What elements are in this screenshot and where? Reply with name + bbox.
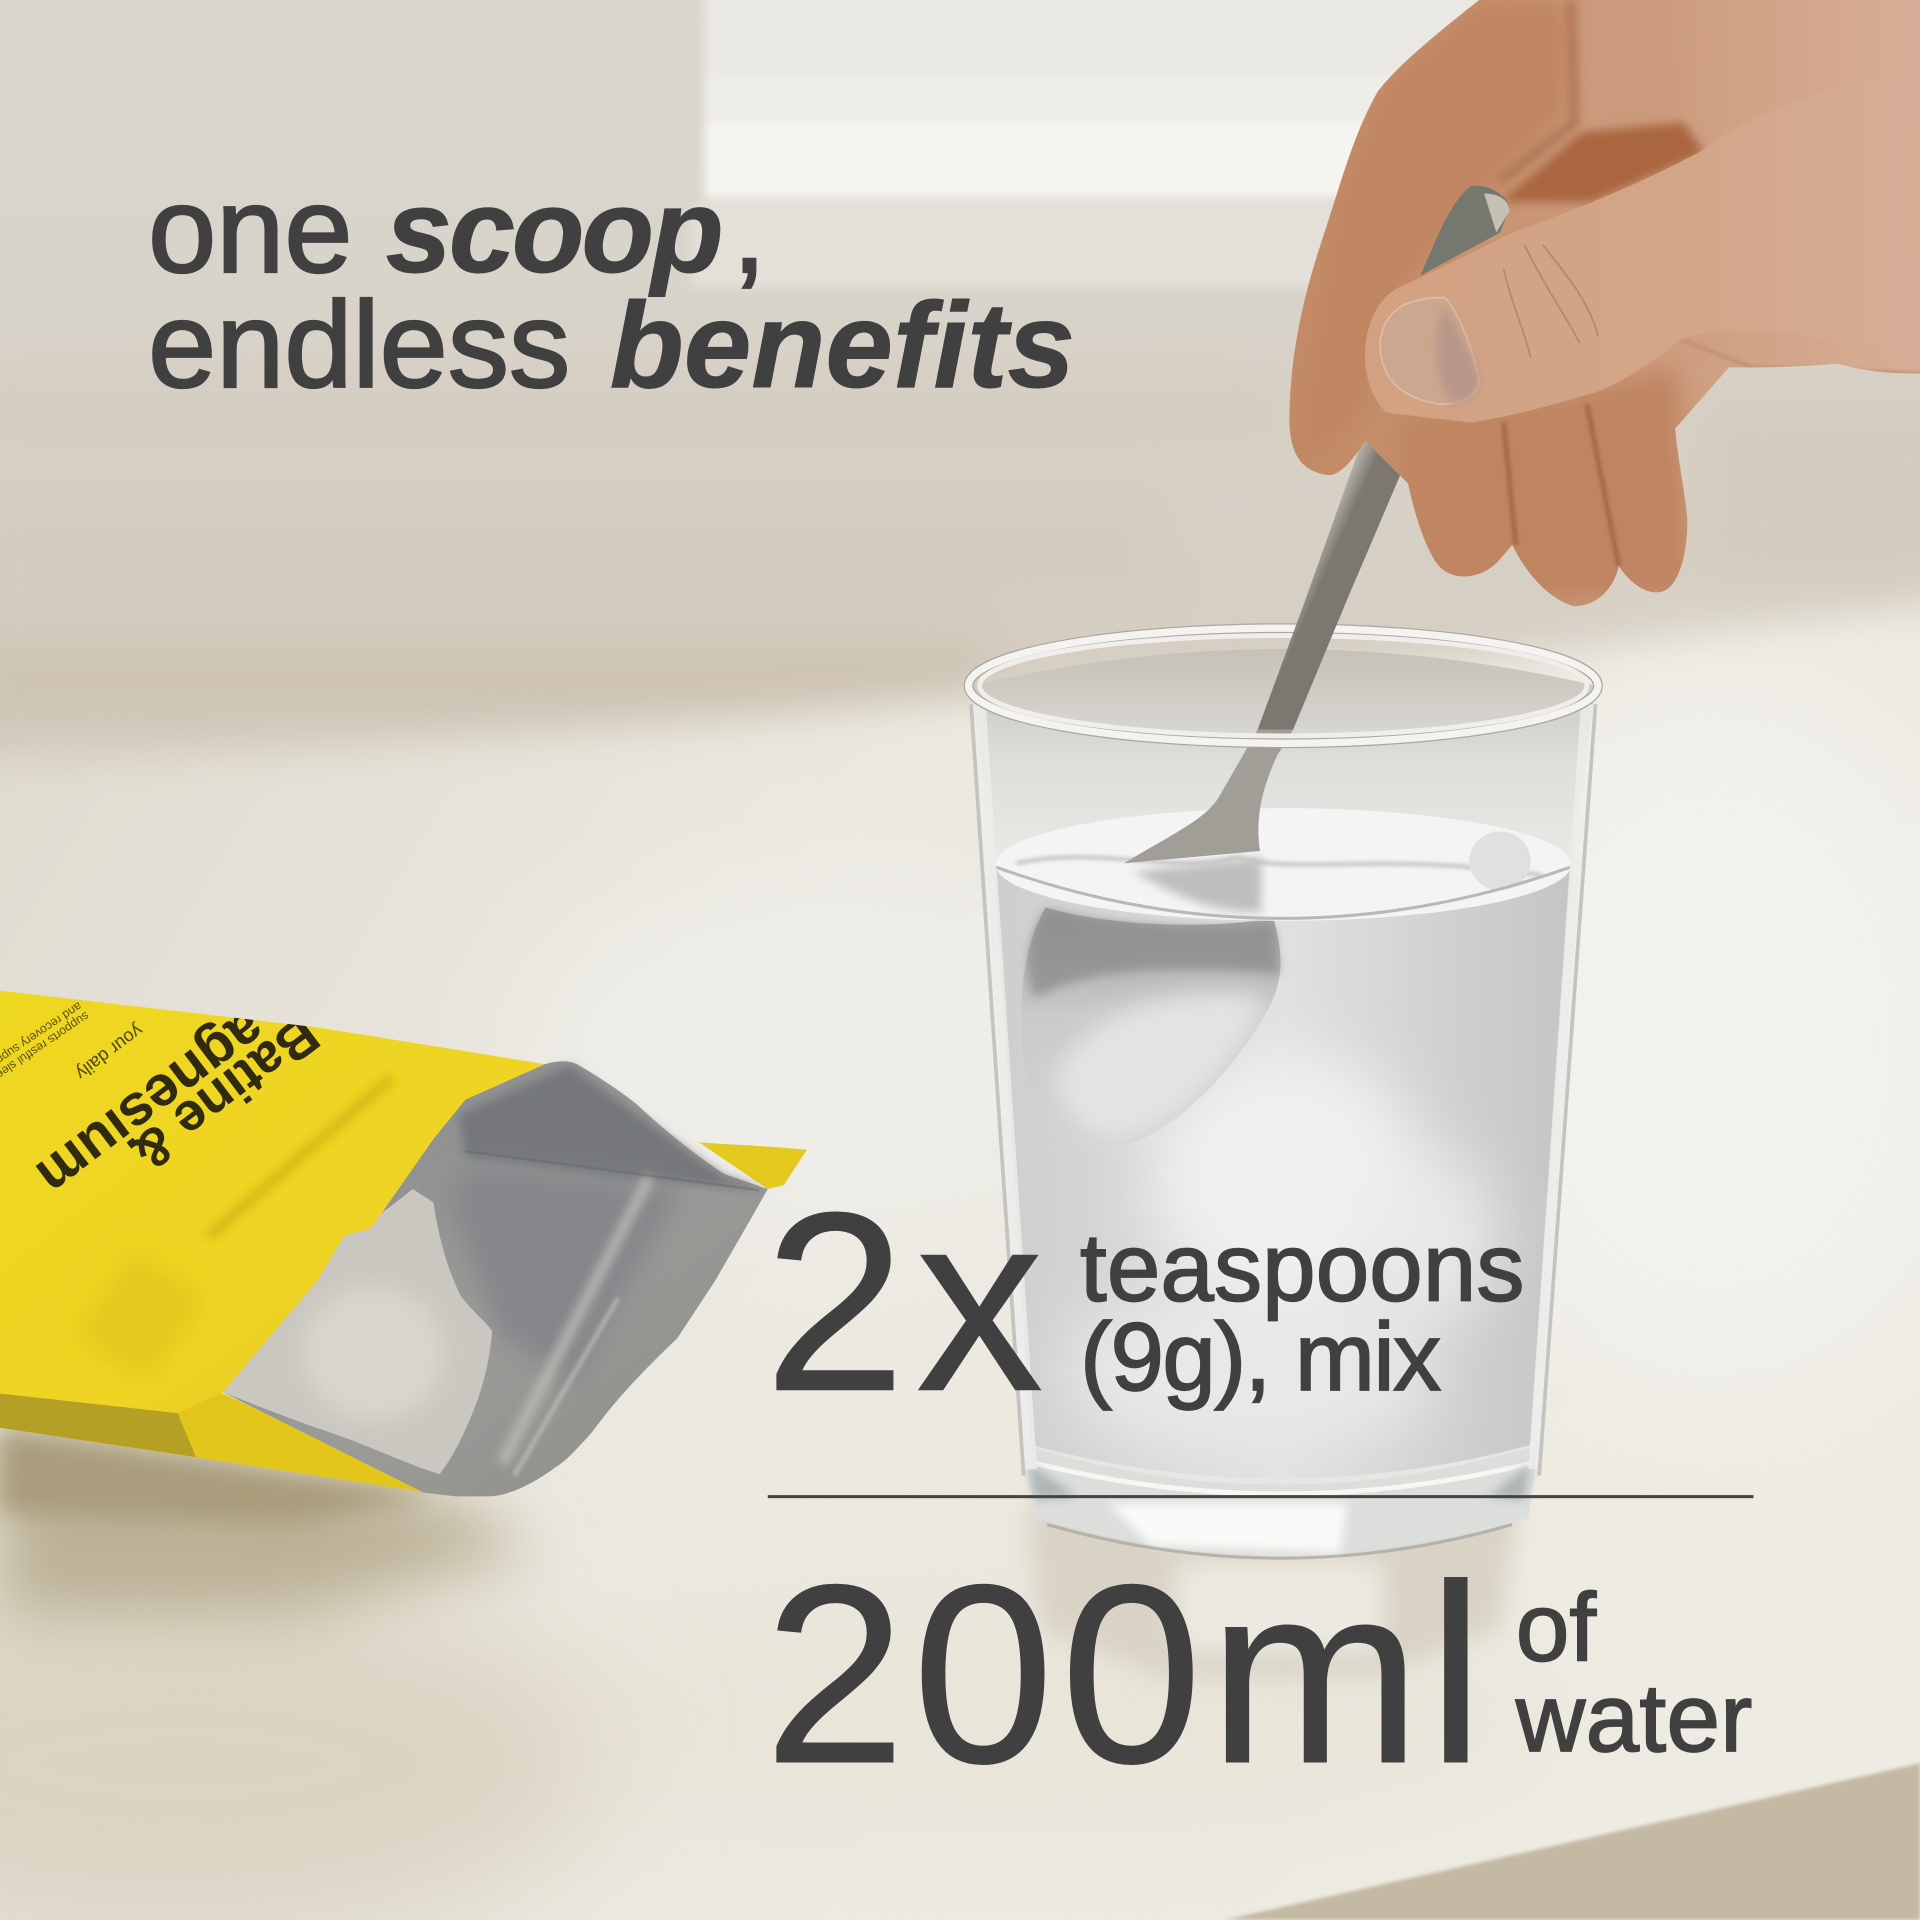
hand shading — [1298, 0, 1920, 600]
dissolving powder cloud — [1065, 1053, 1494, 1457]
hand shape — [1289, 0, 1920, 606]
submerged spoon bowl — [1021, 907, 1281, 1146]
pouch shadow — [0, 1580, 600, 1920]
product pouch — [0, 991, 807, 1496]
teaspoons label: (9g), mix — [1080, 1304, 1441, 1411]
pouch label text: agnesium — [25, 996, 278, 1209]
back ledge — [0, 380, 1920, 722]
spoon neck — [1124, 730, 1293, 863]
silver interior — [223, 1061, 768, 1496]
glass rim — [969, 628, 1598, 743]
title line 1: , — [732, 161, 766, 298]
dosage stat: 2x teaspoons: 2x — [764, 1159, 1043, 1444]
pouch back flap — [699, 1142, 807, 1189]
counter front edge — [1224, 1763, 1920, 1920]
pouch label text: your daily — [71, 1020, 147, 1085]
title line 2: endless — [148, 276, 570, 413]
thumb nail — [1380, 298, 1479, 404]
title line 1: one — [148, 161, 352, 298]
lower yellow flap — [0, 1393, 444, 1495]
water body — [994, 863, 1571, 1479]
bright light on counter — [1433, 686, 1920, 1396]
teaspoons label: teaspoons — [1080, 1214, 1524, 1321]
title line 1: scoop — [386, 165, 724, 298]
title line 2 — [148, 276, 1075, 413]
title line 2: benefits — [610, 277, 1075, 413]
dosage stat: 2x teaspoons — [764, 1159, 1524, 1444]
pouch seam shading — [208, 1078, 392, 1237]
water stat: 200ml of water: 200ml — [764, 1531, 1484, 1816]
pouch label text: Batine & — [120, 1004, 330, 1184]
interior fold — [459, 1065, 765, 1190]
water surface — [996, 808, 1571, 921]
of water label — [1515, 1574, 1752, 1772]
window light — [692, 0, 1512, 288]
glass base — [1024, 1445, 1538, 1555]
glass of water — [969, 628, 1598, 1558]
title line 1 — [148, 161, 766, 298]
barcode stripe — [0, 1393, 196, 1457]
yellow body — [0, 991, 545, 1413]
of water label: of — [1516, 1574, 1596, 1681]
spoon handle — [1258, 186, 1510, 730]
glass walls — [980, 704, 1031, 1469]
divider line — [768, 1495, 1753, 1498]
spoon tip between fingers — [1420, 186, 1510, 276]
thumb — [1365, 73, 1920, 422]
title — [148, 161, 1075, 413]
counter top — [0, 594, 1920, 1920]
glass lower body — [987, 857, 1580, 1556]
thumb knuckle creases — [1504, 245, 1598, 358]
glass reflection on counter — [1026, 1506, 1518, 1678]
of water label: water — [1515, 1665, 1752, 1772]
powder — [223, 1189, 492, 1474]
glass upper body — [972, 649, 1596, 882]
teaspoons label — [1080, 1214, 1524, 1411]
hand holding spoon — [1258, 0, 1920, 730]
